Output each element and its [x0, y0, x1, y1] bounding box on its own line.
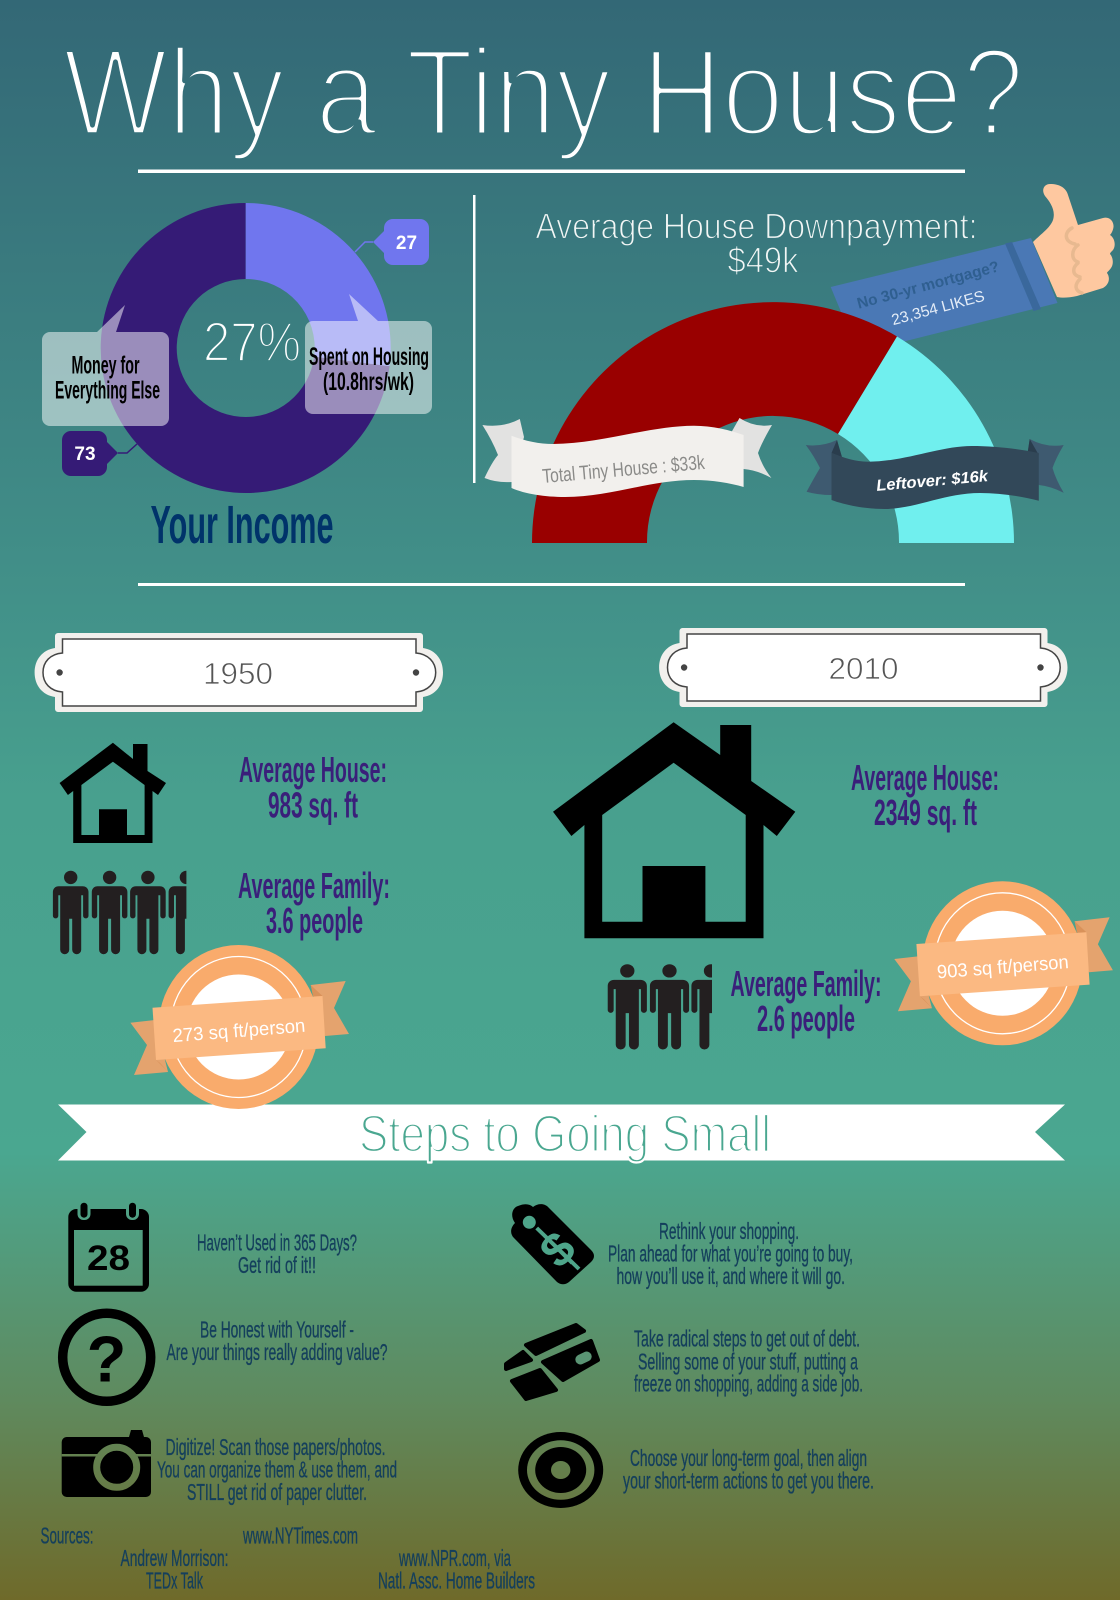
step text: radical steps: [634, 1326, 863, 1396]
plaque: 2010: [659, 628, 1068, 707]
ribbon: leftover: Leftover: $16k: [876, 468, 990, 495]
callout: money for everything else: Money for: [72, 352, 140, 380]
step text: digitize: Digitize! Scan those papers/photos.: [166, 1434, 386, 1460]
icon: small house: [60, 743, 166, 843]
icon: large house: [553, 722, 795, 938]
data bubble: 27: 27: [396, 233, 417, 254]
step text: haven't used: Haven’t Used in 365 Days?: [197, 1230, 357, 1256]
text: average house 1950: [239, 749, 387, 826]
icon: question mark: [63, 1313, 151, 1401]
heading: average house downpayment: Average House Downpayment:: [536, 206, 978, 246]
sources: [40, 1522, 535, 1594]
ribbon: total tiny house: [482, 418, 772, 497]
icon: question mark: ?: [87, 1322, 126, 1396]
step text: digitize: You can organize them & use them, and: [157, 1456, 397, 1482]
sleeve: no 30-yr mortgage likes: [831, 238, 1058, 353]
icon: target: [518, 1432, 603, 1508]
icon: camera: [62, 1430, 151, 1497]
text: average family 1950: Average Family:: [238, 865, 390, 906]
step text: be honest: [166, 1316, 388, 1365]
step text: radical steps: Selling some of your stuff, putting a: [638, 1348, 858, 1374]
banner: steps to going small: Steps to Going Small: [359, 1106, 771, 1164]
data bubble: 73: 73: [74, 444, 96, 465]
callout: spent on housing: Spent on Housing: [309, 343, 429, 371]
banner: steps to going small: [58, 1104, 1065, 1164]
icon: price tag: $: [530, 1222, 586, 1278]
step text: haven't used: [197, 1230, 357, 1278]
ribbon: total tiny house: Total Tiny House : $33k: [541, 452, 706, 488]
text: average family 1950: [238, 865, 390, 941]
icon: family of 3.6: [52, 870, 186, 954]
icon: thumbs up hand: [1033, 184, 1115, 298]
step text: rethink shopping: [608, 1218, 853, 1289]
callout: spent on housing: (10.8hrs/wk): [323, 368, 414, 396]
text: average family 2010: Average Family:: [730, 963, 882, 1004]
step text: be honest: Be Honest with Yourself -: [200, 1316, 354, 1342]
icon: price tag: [511, 1204, 594, 1284]
icon: cut credit card: [506, 1325, 598, 1399]
badge: 903 sq ft per person: 903 sq ft/person: [936, 952, 1069, 983]
sources: www.NPR.com, via: [398, 1545, 511, 1571]
step text: digitize: STILL get rid of paper clutter.: [187, 1479, 367, 1505]
sources: Natl. Assc. Home Builders: [378, 1568, 535, 1594]
step text: long-term goal: Choose your long-term goal, then align: [630, 1445, 867, 1471]
badge: 273 sq ft per person: [130, 945, 349, 1109]
step text: rethink shopping: Plan ahead for what you’re going to buy,: [608, 1240, 853, 1266]
arch chart: downpayment: [532, 302, 1014, 543]
sources: TEDx Talk: [146, 1568, 203, 1594]
data bubble: 27: [355, 219, 429, 265]
step text: long-term goal: [623, 1445, 874, 1494]
text: average family 2010: 2.6 people: [757, 998, 855, 1039]
data bubble: 73: [62, 431, 137, 476]
step text: radical steps: Take radical steps to get out of debt.: [634, 1326, 860, 1352]
callout: money for everything else: Everything Else: [55, 376, 160, 404]
plaque: 2010: 2010: [828, 651, 898, 686]
step text: radical steps: freeze on shopping, adding a side job.: [634, 1370, 863, 1396]
ribbon: leftover: [806, 439, 1064, 509]
heading: average house downpayment: [536, 206, 978, 280]
text: average family 2010: [730, 963, 882, 1039]
heading: your income: Your Income: [150, 495, 334, 555]
heading: average house downpayment: $49k: [728, 240, 799, 280]
badge: 273 sq ft per person: 273 sq ft/person: [172, 1016, 306, 1047]
sleeve: no 30-yr mortgage likes: 23,354 LIKES: [890, 288, 987, 329]
plaque: 1950: [35, 633, 443, 712]
plaque: 1950: 1950: [203, 656, 273, 691]
center percentage: 27%: [203, 310, 301, 373]
text: average house 1950: 983 sq. ft: [268, 784, 358, 826]
step text: rethink shopping: Rethink your shopping.: [659, 1218, 799, 1244]
step text: be honest: Are your things really adding value?: [166, 1339, 388, 1365]
sources: www.NYTimes.com: [242, 1522, 358, 1548]
sources: Sources:: [40, 1522, 94, 1548]
sources: Andrew Morrison:: [120, 1545, 228, 1571]
callout: spent on housing: [305, 294, 432, 414]
icon: family of 2.6: [608, 964, 712, 1050]
text: average house 2010: [851, 757, 999, 833]
step text: digitize: [157, 1434, 397, 1505]
text: average house 2010: Average House:: [851, 757, 999, 798]
badge: 903 sq ft per person: [894, 881, 1113, 1045]
icon: calendar: [68, 1200, 149, 1292]
text: average house 2010: 2349 sq. ft: [874, 792, 977, 833]
title: Why a Tiny House?: [63, 24, 1024, 162]
step text: haven't used: Get rid of it!!: [238, 1252, 316, 1278]
icon: calendar: 28: [87, 1239, 130, 1278]
step text: rethink shopping: how you’ll use it, and where it will go.: [616, 1263, 845, 1289]
text: average house 1950: Average House:: [239, 749, 387, 790]
text: average family 1950: 3.6 people: [266, 900, 363, 941]
callout: money for everything else: [42, 305, 169, 426]
step text: long-term goal: your short-term actions to get you there.: [623, 1468, 874, 1494]
sleeve: no 30-yr mortgage likes: No 30-yr mortgage?: [855, 258, 1001, 313]
donut chart: your income: [101, 203, 391, 493]
